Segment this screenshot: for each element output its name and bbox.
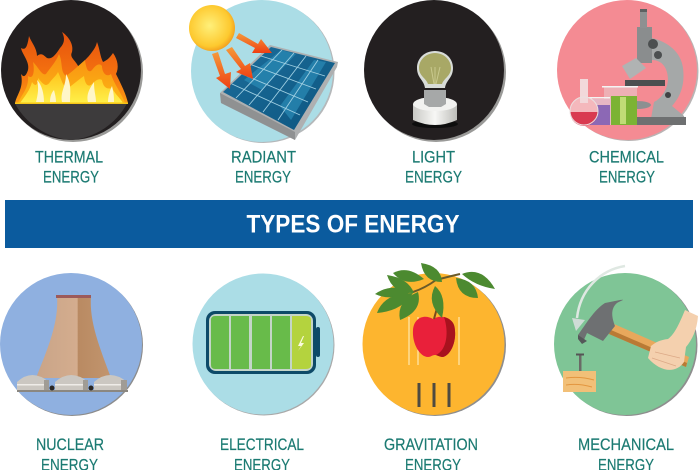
heading: radiant energy label: ENERGY — [235, 168, 291, 187]
icon: red flask — [570, 79, 598, 126]
heading: radiant label: RADIANT — [231, 148, 296, 166]
heading: chemical label: CHEMICAL — [589, 148, 664, 166]
icon: fall lines — [409, 317, 459, 365]
icon: purple beaker — [582, 97, 611, 125]
panel: nuclear energy — [0, 273, 143, 416]
title banner — [5, 200, 693, 248]
icon: sun rays — [212, 33, 272, 89]
icon: leafy branch — [375, 263, 495, 320]
icon: flames — [15, 32, 128, 103]
icon: hammer — [578, 300, 689, 367]
icon: gravity arrows — [419, 383, 449, 407]
icon: solar panel — [220, 45, 338, 140]
panel: chemical energy — [557, 0, 698, 141]
heading: electrical label: ELECTRICAL — [220, 435, 304, 454]
panel: gravitation energy — [362, 263, 506, 416]
icon: cooling tower — [36, 295, 111, 378]
title: TYPES OF ENERGY — [246, 210, 460, 238]
icon: apple — [413, 308, 455, 357]
icon: nail — [576, 354, 584, 372]
icon: light bulb — [412, 51, 458, 128]
heading: thermal energy label: ENERGY — [43, 168, 99, 187]
heading: light label: LIGHT — [412, 148, 455, 166]
icon: motion arrow — [572, 266, 625, 331]
panel: electrical energy — [192, 274, 334, 416]
icon: green beaker — [602, 86, 638, 125]
panel: radiant energy — [189, 0, 338, 143]
heading: mechanical label: MECHANICAL — [578, 435, 674, 454]
heading: chemical energy label: ENERGY — [599, 168, 655, 187]
icon: battery — [206, 311, 320, 374]
panel: mechanical energy — [554, 266, 698, 416]
heading: light energy label: ENERGY — [405, 168, 462, 187]
icon: reactor buildings — [17, 375, 128, 392]
icon: ground — [15, 104, 127, 140]
icon: sun — [189, 5, 235, 51]
heading: gravitation label: GRAVITATION — [384, 435, 478, 454]
icon: wood block — [563, 371, 596, 392]
heading: nuclear label: NUCLEAR — [36, 435, 104, 454]
panel: light energy — [364, 0, 506, 142]
panel: thermal energy — [1, 0, 143, 142]
icon: hand — [648, 310, 698, 370]
icon: microscope — [622, 9, 686, 125]
heading: thermal label: THERMAL — [35, 148, 103, 166]
